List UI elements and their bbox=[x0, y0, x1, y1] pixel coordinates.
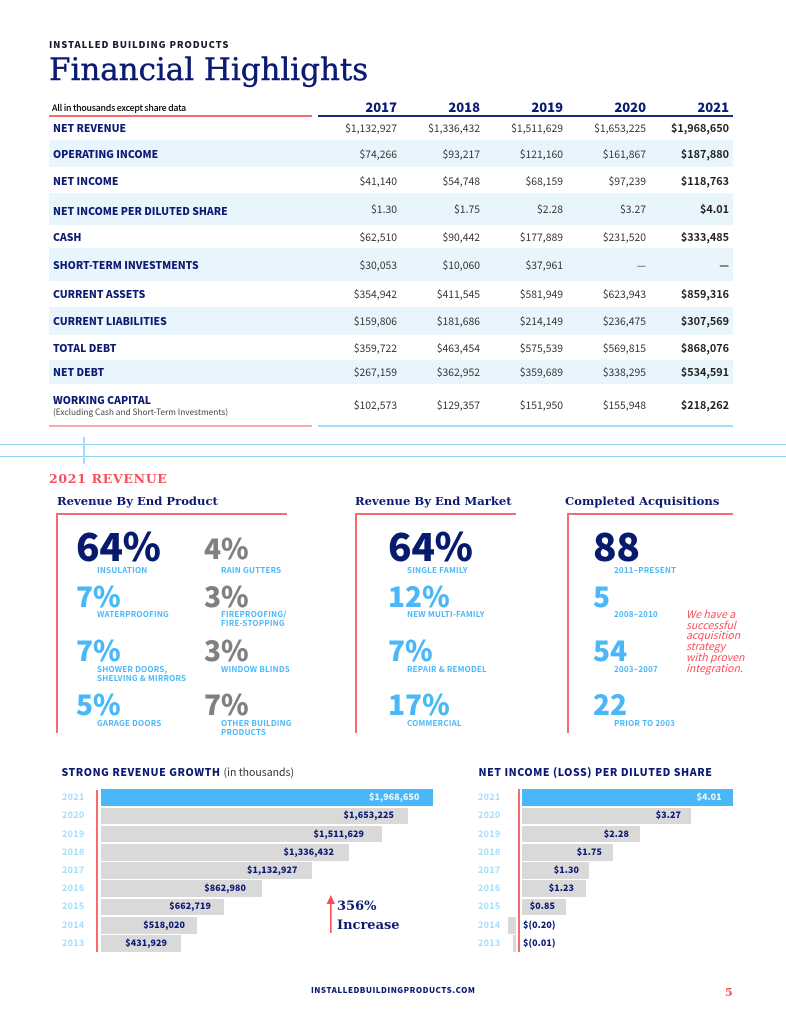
stat: other building products: 7% bbox=[204, 684, 249, 724]
chart: strong revenue growth: 2018 bbox=[62, 845, 84, 858]
row: cash: $333,485 bbox=[681, 228, 729, 244]
chart: strong revenue growth: $1,336,432 bbox=[284, 845, 334, 858]
row: net income: $118,763 bbox=[681, 172, 729, 188]
stat: prior to 2003: PRIOR TO 2003 bbox=[614, 718, 675, 729]
row: net revenue: $1,132,927 bbox=[345, 120, 397, 134]
callout: acquisition strategy: successful bbox=[686, 618, 736, 633]
panel heading: Revenue By End Product bbox=[57, 494, 218, 508]
chart: net income per diluted share: 2015 bbox=[478, 899, 500, 912]
stat: shower doors: SHELVING & MIRRORS bbox=[97, 673, 186, 684]
row: net debt: NET DEBT bbox=[53, 364, 104, 378]
row: current assets: $581,949 bbox=[520, 286, 563, 300]
row: working capital: $155,948 bbox=[603, 396, 646, 412]
stat: 2008-2010 bbox=[593, 576, 658, 620]
row: current assets bbox=[53, 286, 729, 302]
increase text: 356% bbox=[337, 899, 376, 914]
chart: strong revenue growth: $1,653,225 bbox=[344, 808, 394, 821]
icon: up arrow bbox=[326, 895, 335, 933]
row: total debt: $575,539 bbox=[520, 340, 563, 354]
row: current liabilities: CURRENT LIABILITIES bbox=[53, 312, 167, 328]
row: net revenue: $1,653,225 bbox=[594, 120, 646, 134]
stat: repair and remodel bbox=[388, 630, 487, 675]
chart: strong revenue growth: 2014 bbox=[62, 918, 84, 931]
stat: other building products: OTHER BUILDING bbox=[221, 718, 292, 729]
row: net income per diluted share bbox=[53, 200, 729, 218]
page number: 5 bbox=[725, 986, 733, 999]
row: short-term investments: $37,961 bbox=[526, 256, 563, 272]
stat: new multi-family: NEW MULTI-FAMILY bbox=[407, 609, 485, 620]
chart: strong revenue growth: $1,132,927 bbox=[247, 863, 298, 876]
chart: net income per diluted share: $2.28 bbox=[604, 827, 629, 840]
financial table: 2017 bbox=[365, 97, 397, 116]
row: net income: $68,159 bbox=[526, 172, 563, 188]
stat: window blinds: 3% bbox=[204, 630, 249, 670]
stat: insulation: 64% bbox=[76, 517, 161, 573]
stat: repair and remodel: 7% bbox=[388, 630, 433, 670]
row: operating income: $93,217 bbox=[442, 146, 480, 160]
chart: strong revenue growth: $862,980 bbox=[204, 881, 246, 894]
row: net revenue: $1,336,432 bbox=[428, 120, 480, 134]
chart: net income per diluted share: $1.30 bbox=[554, 863, 579, 876]
chart: net income per diluted share: $1.75 bbox=[577, 845, 602, 858]
chart: net income per diluted share: 2017 bbox=[478, 863, 500, 876]
year headers bbox=[365, 97, 729, 116]
row: short-term investments: $30,053 bbox=[360, 256, 397, 272]
chart: net income per diluted share: $1.23 bbox=[549, 881, 574, 894]
row: net income per diluted share: $1.75 bbox=[454, 200, 480, 216]
row: total debt bbox=[53, 340, 729, 356]
stat: new multi-family bbox=[388, 576, 485, 620]
stat: 2011-present: 88 bbox=[593, 517, 640, 573]
chart: net income per diluted share: $(0.20) bbox=[523, 918, 556, 931]
callout: acquisition strategy bbox=[686, 607, 744, 676]
chart: net income per diluted share: 2016 bbox=[478, 881, 500, 894]
row: current assets: $623,943 bbox=[603, 286, 646, 300]
row: operating income: OPERATING INCOME bbox=[53, 146, 158, 160]
stat: 2003-2007: 54 bbox=[593, 630, 627, 670]
row: cash: $231,520 bbox=[603, 228, 646, 244]
panel: revenue by end market bbox=[355, 494, 516, 733]
stat: insulation: INSULATION bbox=[97, 564, 148, 576]
row: net debt: $338,295 bbox=[603, 364, 646, 378]
row: net revenue: $1,511,629 bbox=[511, 120, 563, 134]
financial table: 2020 bbox=[614, 97, 646, 116]
row: net income: $41,140 bbox=[360, 172, 397, 188]
chart: strong revenue growth: 2020 bbox=[62, 808, 84, 821]
stat: rain gutters bbox=[204, 528, 281, 576]
row: current liabilities: $214,149 bbox=[520, 312, 563, 328]
row: cash: $177,889 bbox=[520, 228, 563, 244]
row: operating income: $161,867 bbox=[603, 146, 646, 160]
financial table: 2019 bbox=[531, 97, 563, 116]
stat: commercial: 17% bbox=[388, 684, 450, 724]
stat: fireproofing: FIRE-STOPPING bbox=[221, 618, 285, 629]
row: net debt: $267,159 bbox=[354, 364, 397, 378]
row: working capital: WORKING CAPITAL bbox=[53, 392, 151, 407]
row: working capital: $218,262 bbox=[681, 396, 729, 412]
chart: strong revenue growth: $662,719 bbox=[169, 899, 211, 912]
stat: waterproofing: WATERPROOFING bbox=[97, 609, 169, 620]
row: net income: $54,748 bbox=[442, 172, 480, 188]
row: short-term investments: — bbox=[719, 256, 729, 272]
row: total debt: $569,815 bbox=[603, 340, 646, 354]
table note: All in thousands except share data bbox=[52, 101, 186, 114]
stat: waterproofing: 7% bbox=[76, 576, 121, 616]
chart heading: NET INCOME (LOSS) PER DILUTED SHARE bbox=[478, 765, 712, 780]
stat: 2011-present: 2011–PRESENT bbox=[614, 564, 676, 576]
chart: net income per diluted share: 2013 bbox=[478, 936, 500, 949]
row: working capital bbox=[53, 392, 729, 418]
row: cash bbox=[53, 228, 729, 244]
stat: single family: SINGLE FAMILY bbox=[407, 564, 468, 576]
footer url: INSTALLEDBUILDINGPRODUCTS.COM bbox=[311, 985, 475, 996]
row: net income per diluted share: $3.27 bbox=[620, 200, 646, 216]
chart: strong revenue growth: 2019 bbox=[62, 827, 84, 840]
row: total debt: $359,722 bbox=[354, 340, 397, 354]
callout: acquisition strategy: strategy bbox=[686, 639, 725, 654]
row: current liabilities: $159,806 bbox=[354, 312, 397, 328]
row: operating income: $121,160 bbox=[520, 146, 563, 160]
stat: prior to 2003: 22 bbox=[593, 684, 627, 724]
financial table bbox=[49, 97, 733, 427]
stat: prior to 2003 bbox=[593, 684, 675, 729]
chart: net income per diluted share: 2021 bbox=[478, 790, 500, 803]
row: current liabilities: $307,569 bbox=[681, 312, 729, 328]
row: current liabilities: $181,686 bbox=[437, 312, 480, 328]
company name: INSTALLED BUILDING PRODUCTS bbox=[49, 37, 229, 51]
row: total debt: TOTAL DEBT bbox=[53, 340, 116, 354]
row: net debt: $362,952 bbox=[437, 364, 480, 378]
row: current assets: CURRENT ASSETS bbox=[53, 286, 145, 300]
row: short-term investments: $10,060 bbox=[442, 256, 480, 272]
callout: acquisition strategy: integration. bbox=[686, 661, 743, 676]
chart: net income per diluted share: $3.27 bbox=[656, 808, 681, 821]
row: net income bbox=[53, 172, 729, 188]
chart: strong revenue growth: 2021 bbox=[62, 790, 84, 803]
row: cash: CASH bbox=[53, 228, 81, 244]
row: operating income bbox=[53, 146, 729, 162]
chart: strong revenue growth: $518,020 bbox=[143, 918, 185, 931]
section heading: 2021 revenue: 2021 REVENUE bbox=[49, 471, 168, 486]
callout: acquisition strategy: acquisition bbox=[686, 628, 740, 643]
row: total debt: $463,454 bbox=[437, 340, 480, 354]
panel: revenue by end product bbox=[56, 494, 292, 738]
stat: garage doors bbox=[76, 684, 161, 729]
row: net income per diluted share: NET INCOME PER DILUTED SHARE bbox=[53, 202, 228, 218]
chart: strong revenue growth: $1,968,650 bbox=[369, 790, 420, 803]
row: working capital: $129,357 bbox=[437, 396, 480, 412]
chart: strong revenue growth: 2015 bbox=[62, 899, 84, 912]
row: net income per diluted share: $4.01 bbox=[700, 200, 729, 216]
header: company name and title bbox=[49, 37, 368, 88]
callout: acquisition strategy: We have a bbox=[686, 607, 735, 622]
stat: 2003-2007 bbox=[593, 630, 658, 675]
stat: fireproofing: 3% bbox=[204, 576, 249, 616]
row: operating income: $74,266 bbox=[360, 146, 397, 160]
stat: fireproofing bbox=[204, 576, 287, 629]
chart: strong revenue growth: 2016 bbox=[62, 881, 84, 894]
row: net debt: $359,689 bbox=[520, 364, 563, 378]
stat: shower doors: SHOWER DOORS, bbox=[97, 664, 167, 675]
chart: net income per diluted share: 2018 bbox=[478, 845, 500, 858]
row: short-term investments: SHORT-TERM INVESTMENTS bbox=[53, 256, 199, 272]
chart: strong revenue growth: 2017 bbox=[62, 863, 84, 876]
row: short-term investments: — bbox=[637, 256, 646, 272]
row: operating income: $187,880 bbox=[681, 146, 729, 162]
row: cash: $62,510 bbox=[360, 228, 397, 244]
row: current liabilities: $236,475 bbox=[603, 312, 646, 328]
row: short-term investments bbox=[53, 256, 729, 272]
financial table: 2018 bbox=[448, 97, 480, 116]
row: current liabilities bbox=[53, 312, 729, 328]
chart: net income per diluted share: 2019 bbox=[478, 827, 500, 840]
panel heading: Completed Acquisitions bbox=[565, 494, 719, 508]
row: net income: NET INCOME bbox=[53, 172, 118, 188]
chart: strong revenue growth bbox=[62, 765, 433, 952]
chart: net income per diluted share bbox=[478, 765, 733, 952]
row: net debt: $534,591 bbox=[681, 364, 729, 380]
chart: net income per diluted share: $0.85 bbox=[530, 899, 555, 912]
row: working capital: (Excluding Cash and Short-Term Investments) bbox=[53, 406, 228, 418]
stat: 2011-present bbox=[593, 517, 676, 576]
stat: shower doors: 7% bbox=[76, 630, 121, 670]
chart: strong revenue growth: 2013 bbox=[62, 936, 84, 949]
row: working capital: $102,573 bbox=[354, 396, 397, 412]
stat: other building products: PRODUCTS bbox=[221, 727, 266, 738]
stat: 2008-2010: 5 bbox=[593, 576, 610, 616]
row: total debt: $868,076 bbox=[681, 340, 729, 356]
panel: completed acquisitions bbox=[565, 494, 744, 733]
row: current assets: $354,942 bbox=[354, 286, 397, 300]
chart: net income per diluted share: $(0.01) bbox=[523, 936, 556, 949]
stat: waterproofing bbox=[76, 576, 169, 620]
chart: net income per diluted share: 2014 bbox=[478, 918, 500, 931]
row: cash: $90,442 bbox=[442, 228, 480, 244]
stat: window blinds: WINDOW BLINDS bbox=[221, 664, 290, 675]
stat: commercial: COMMERCIAL bbox=[407, 718, 462, 729]
stat: other building products bbox=[204, 684, 292, 738]
panel heading: Revenue By End Market bbox=[355, 494, 512, 508]
stat: window blinds bbox=[204, 630, 290, 675]
row: net revenue bbox=[53, 120, 729, 136]
stat: shower doors bbox=[76, 630, 186, 684]
stat: 2003-2007: 2003–2007 bbox=[614, 664, 658, 675]
financial table: 2021 bbox=[697, 97, 729, 116]
stat: fireproofing: FIREPROOFING/ bbox=[221, 609, 287, 620]
row: net revenue: $1,968,650 bbox=[671, 120, 729, 136]
row: working capital: $151,950 bbox=[520, 396, 563, 412]
stat: new multi-family: 12% bbox=[388, 576, 450, 616]
row: net income per diluted share: $2.28 bbox=[537, 200, 563, 216]
row: net debt bbox=[53, 364, 729, 380]
row: net income: $97,239 bbox=[608, 172, 646, 188]
stat: rain gutters: RAIN GUTTERS bbox=[221, 564, 281, 576]
row: current assets: $411,545 bbox=[437, 286, 480, 300]
page title: Financial Highlights bbox=[49, 52, 368, 88]
stat: 2008-2010: 2008–2010 bbox=[614, 609, 658, 620]
increase text bbox=[337, 899, 400, 933]
increase text: Increase bbox=[337, 918, 400, 933]
row: net revenue: NET REVENUE bbox=[53, 120, 126, 134]
chart: net income per diluted share: $4.01 bbox=[696, 790, 722, 803]
chart: net income per diluted share: 2020 bbox=[478, 808, 500, 821]
chart: strong revenue growth: $1,511,629 bbox=[314, 827, 364, 840]
row: net income per diluted share: $1.30 bbox=[371, 200, 397, 216]
stat: single family: 64% bbox=[388, 517, 473, 573]
stat: garage doors: GARAGE DOORS bbox=[97, 718, 161, 729]
row: current assets: $859,316 bbox=[681, 286, 729, 302]
stat: rain gutters: 4% bbox=[204, 528, 249, 568]
chart heading: STRONG REVENUE GROWTH (in thousands) bbox=[62, 765, 294, 780]
stat: garage doors: 5% bbox=[76, 684, 121, 724]
chart: strong revenue growth: $431,929 bbox=[125, 936, 167, 949]
callout: acquisition strategy: with proven bbox=[686, 650, 744, 665]
stat: repair and remodel: REPAIR & REMODEL bbox=[407, 664, 487, 675]
callout: 356% increase bbox=[326, 895, 400, 933]
